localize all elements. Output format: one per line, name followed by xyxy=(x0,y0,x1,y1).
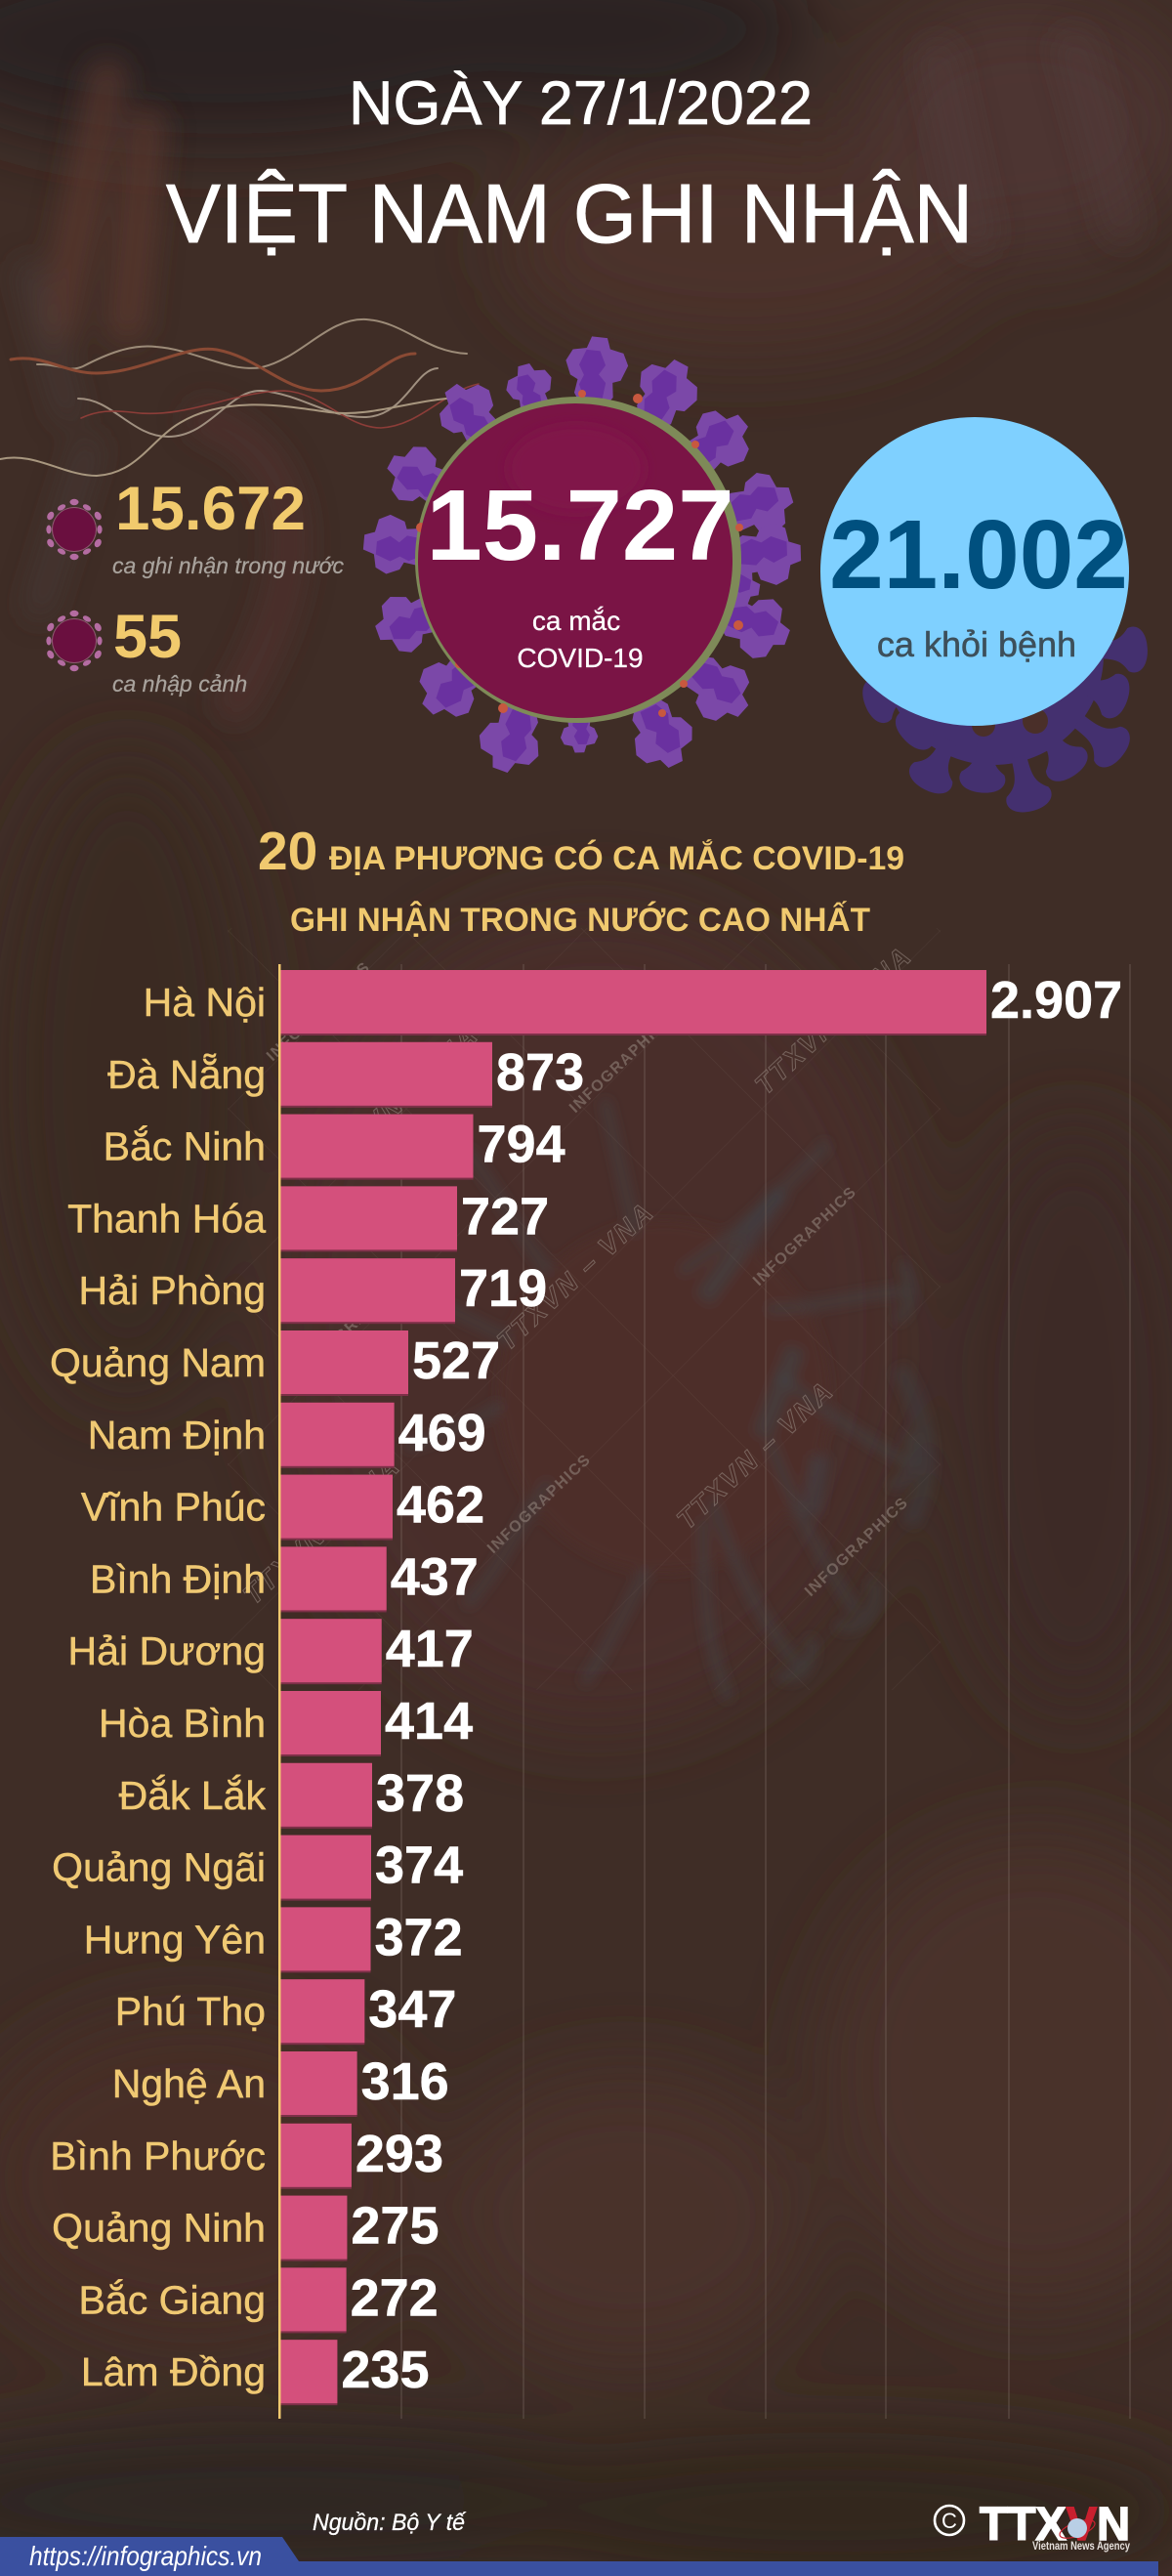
title: Việt Nam ghi nhận: VIỆT NAM GHI NHẬN xyxy=(166,168,973,261)
watermarks: TTXVN – VNA xyxy=(671,1376,838,1535)
decorative wavy lines xyxy=(0,319,479,476)
bar: Quảng Ninh: Quảng Ninh xyxy=(52,2206,266,2251)
stat: imported cases xyxy=(112,603,247,697)
bar: Bình Định: 437 xyxy=(391,1547,479,1606)
virus icon: imported cases xyxy=(46,611,103,671)
bar: Đà Nẵng xyxy=(107,1042,584,1108)
bar: Bình Định: Bình Định xyxy=(90,1556,266,1601)
bar: Hải Dương: Hải Dương xyxy=(68,1628,266,1673)
watermarks: TTXVN – VNA xyxy=(315,1021,482,1179)
central virus with total cases xyxy=(361,334,802,781)
stat: imported cases: 55 xyxy=(113,603,182,671)
bar: Bắc Ninh xyxy=(104,1115,565,1180)
logo: TTXVN: Vietnam News Agency xyxy=(1032,2539,1130,2553)
bar: Lâm Đồng: Lâm Đồng xyxy=(81,2349,266,2394)
stat: domestic cases: 15.672 xyxy=(115,475,306,543)
bar: Hưng Yên: 372 xyxy=(375,1908,463,1966)
bar chart xyxy=(50,970,1122,2405)
bar: Bắc Giang: 272 xyxy=(351,2268,439,2327)
source: Nguồn: Bộ Y tế xyxy=(313,2510,467,2536)
watermarks: TTXVN – VNA xyxy=(491,1198,658,1356)
virus membrane xyxy=(415,397,741,723)
watermarks: INFOGRAPHICS xyxy=(484,1452,594,1557)
bar: Hưng Yên xyxy=(84,1907,463,1972)
bar: Bắc Ninh: Bắc Ninh xyxy=(104,1124,266,1169)
central blurred virus xyxy=(400,1104,926,1696)
bar: Bắc Ninh: 794 xyxy=(477,1116,565,1174)
bar: Đắk Lắk: 378 xyxy=(376,1764,464,1823)
footer url: https://infographics.vn xyxy=(29,2541,262,2571)
bar: Hà Nội: 2.907 xyxy=(990,971,1122,1030)
bar: Hà Nội xyxy=(144,970,1122,1035)
bar: Phú Thọ: Phú Thọ xyxy=(115,1989,266,2034)
total cases caption xyxy=(517,606,644,673)
bar: Hà Nội: Hà Nội xyxy=(144,980,266,1025)
bar: Quảng Ninh xyxy=(52,2196,440,2261)
bar: Nghệ An: Nghệ An xyxy=(112,2061,266,2106)
bar: Hải Dương: 417 xyxy=(386,1620,474,1678)
bar: Quảng Ngãi: 374 xyxy=(375,1837,463,1895)
stat: imported cases: ca nhập cảnh xyxy=(112,671,247,697)
bar: Nam Định xyxy=(88,1403,486,1468)
watermarks: INFOGRAPHICS xyxy=(301,1270,410,1375)
watermarks: INFOGRAPHICS xyxy=(264,959,373,1065)
logo: TTXVN: TTXVN xyxy=(980,2499,1130,2551)
total cases caption: ca mắc xyxy=(532,606,620,636)
bar: Quảng Ninh: 275 xyxy=(351,2197,440,2256)
total cases caption: COVID-19 xyxy=(517,643,644,673)
bar: Hòa Bình xyxy=(99,1691,473,1756)
watermarks: INFOGRAPHICS xyxy=(750,1184,859,1289)
recovered number: 21.002 xyxy=(829,500,1128,610)
bar: Vĩnh Phúc: Vĩnh Phúc xyxy=(81,1485,266,1530)
bar: Phú Thọ xyxy=(115,1979,456,2045)
bar: Lâm Đồng xyxy=(81,2340,430,2405)
chart grid lines xyxy=(401,964,1130,2419)
virus body xyxy=(418,403,732,718)
bar: Thanh Hóa: Thanh Hóa xyxy=(67,1196,266,1241)
bar: Bắc Giang: Bắc Giang xyxy=(79,2277,266,2322)
bar: Đắk Lắk: Đắk Lắk xyxy=(119,1773,266,1818)
virus spikes xyxy=(361,334,802,781)
bar: Bình Phước: 293 xyxy=(356,2125,443,2183)
stat: domestic cases: ca ghi nhận trong nước xyxy=(112,553,344,578)
recovered caption: ca khỏi bệnh xyxy=(877,624,1076,664)
bar: Lâm Đồng: 235 xyxy=(341,2341,430,2399)
bar: Bình Phước: Bình Phước xyxy=(50,2133,266,2178)
logo: TTXVN: C xyxy=(942,2509,957,2533)
bar: Thanh Hóa xyxy=(67,1186,549,1251)
bar: Hải Phòng: 719 xyxy=(459,1259,547,1318)
bar: Vĩnh Phúc xyxy=(81,1475,484,1541)
bar: Phú Thọ: 347 xyxy=(368,1980,456,2039)
bar: Thanh Hóa: 727 xyxy=(461,1187,549,1246)
bar: Nghệ An: 316 xyxy=(361,2052,449,2111)
watermarks: TTXVN – VNA xyxy=(237,1452,404,1610)
footer band xyxy=(0,2537,1158,2576)
bar: Vĩnh Phúc: 462 xyxy=(397,1476,484,1535)
bar: Đắk Lắk xyxy=(119,1763,464,1829)
recovered circle xyxy=(820,417,1129,726)
bar: Đà Nẵng: Đà Nẵng xyxy=(107,1052,266,1097)
virus icon: domestic cases xyxy=(46,499,103,560)
chart heading: ĐỊA PHƯƠNG CÓ CA MẮC COVID-19 xyxy=(329,838,904,877)
bar: Hải Phòng: Hải Phòng xyxy=(79,1268,266,1313)
bar: Bình Định xyxy=(90,1546,479,1612)
bar: Bắc Giang xyxy=(79,2267,439,2333)
bar: Nam Định: Nam Định xyxy=(88,1413,266,1457)
bar: Nam Định: 469 xyxy=(398,1404,486,1462)
watermarks: TTXVN – VNA xyxy=(749,942,916,1100)
bar: Hòa Bình: Hòa Bình xyxy=(99,1701,266,1746)
bar: Quảng Nam xyxy=(50,1330,500,1396)
total cases number: 15.727 xyxy=(426,469,734,581)
title: date: NGÀY 27/1/2022 xyxy=(349,69,813,138)
purple virus behind recovered circle xyxy=(857,544,1149,817)
bar: Quảng Ngãi xyxy=(52,1836,463,1901)
bar: Hưng Yên: Hưng Yên xyxy=(84,1917,266,1962)
bar: Quảng Nam: 527 xyxy=(412,1331,500,1390)
watermarks xyxy=(237,942,916,1610)
bar: Hải Phòng xyxy=(79,1258,547,1324)
chart heading xyxy=(258,821,904,939)
watermarks: INFOGRAPHICS xyxy=(566,1011,676,1117)
watermarks: INFOGRAPHICS xyxy=(802,1495,911,1600)
bar: Quảng Ngãi: Quảng Ngãi xyxy=(52,1845,266,1890)
bar: Đà Nẵng: 873 xyxy=(496,1043,584,1102)
bar: Quảng Nam: Quảng Nam xyxy=(50,1340,266,1385)
bar: Hòa Bình: 414 xyxy=(385,1692,473,1751)
bar: Bình Phước xyxy=(50,2124,443,2189)
bar: Nghệ An xyxy=(112,2051,449,2117)
bar: Hải Dương xyxy=(68,1619,474,1684)
chart heading: 20 xyxy=(258,821,317,881)
chart heading: GHI NHẬN TRONG NƯỚC CAO NHẤT xyxy=(290,900,870,939)
chart axis xyxy=(278,964,281,2419)
stat: domestic cases xyxy=(112,475,344,578)
watermark diamond pattern xyxy=(228,928,941,1690)
